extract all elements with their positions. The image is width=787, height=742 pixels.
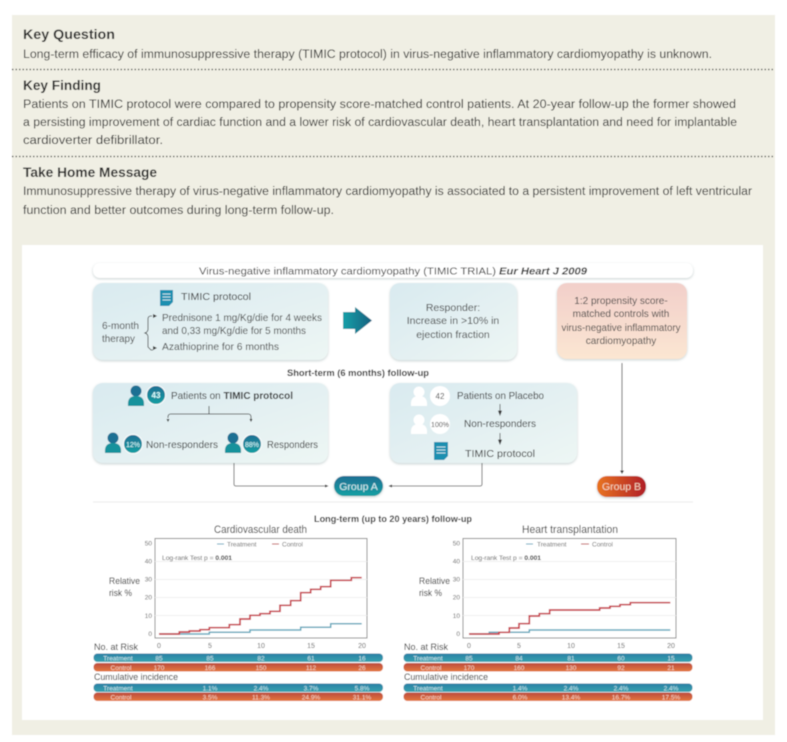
chart: heart transplantation: risk %: [419, 588, 442, 599]
table: left numbers at risk: 16: [358, 656, 366, 662]
text block: key question: [23, 27, 712, 61]
panel: patients on placebo: TIMIC protocol: [465, 448, 535, 460]
connector: TIMIC patients to group A: [234, 463, 328, 488]
panel: patients on placebo: Non-responders: [464, 418, 536, 430]
table: left numbers at risk: 61: [307, 656, 315, 662]
control curve: [159, 578, 362, 634]
arrow: protocol to responder: [343, 307, 372, 334]
panel: patients on TIMIC protocol: [93, 383, 328, 463]
table: right numbers at risk: 160: [514, 665, 525, 672]
panel: patients on TIMIC protocol: Non-responders: [146, 439, 218, 451]
chart: heart transplantation: 15: [617, 643, 625, 650]
table: left cumulative incidence: 24.9%: [302, 694, 320, 702]
chart: cardiovascular death: Log-rank Test p = 0.001: [162, 555, 232, 562]
table: left cumulative incidence: 2.4%: [254, 686, 269, 692]
chart: heart transplantation: 0: [456, 631, 460, 638]
icon: non-responders 12%: [105, 432, 142, 454]
table: left cumulative incidence: 5.8%: [355, 686, 370, 692]
table: left cumulative incidence: 3.7%: [304, 686, 319, 692]
table: right cumulative incidence: 6.0%: [513, 694, 528, 702]
chart: cardiovascular death: 15: [307, 643, 315, 650]
chart: cardiovascular death: 10: [257, 643, 265, 650]
chart: heart transplantation: 10: [567, 643, 575, 650]
table: left numbers at risk: 82: [257, 656, 265, 662]
table: right cumulative incidence: 2.4%: [564, 686, 579, 692]
table: right cumulative incidence: 13.4%: [562, 694, 580, 702]
panel: TIMIC protocol: Prednisone 1 mg/Kg/die for 4 weeks: [162, 312, 322, 324]
icon: patient 43: [128, 386, 166, 406]
branch arrows: [168, 406, 251, 421]
panel: TIMIC protocol: and 0,33 mg/Kg/die for 5 months: [162, 325, 306, 337]
chart: heart transplantation: Relative: [419, 576, 450, 587]
table: right cumulative incidence: 1.4%: [513, 686, 528, 692]
icon: non-responders 100%: [411, 414, 450, 434]
chart: cardiovascular death: Cardiovascular death: [214, 524, 307, 536]
text block: key finding: Patients on TIMIC protocol were compared to propensity score-matched control patients. At 20-year follow-up the former showed: [23, 99, 736, 111]
icon: non-responders 12%: 12%: [126, 442, 140, 449]
table: left cumulative incidence: 3.5%: [203, 694, 218, 702]
chart: heart transplantation: Treatment: [537, 542, 567, 548]
chart: heart transplantation: 5: [517, 643, 521, 650]
icon: responders 88%: [225, 432, 262, 454]
table: left numbers at risk: 85: [206, 656, 214, 662]
table: right numbers at risk: 170: [464, 665, 475, 672]
text block: take home message: Immunosuppressive therapy of virus-negative inflammatory cardiomyopathy is associated to a persistent improvement of left ventricular: [23, 186, 752, 198]
chart: cardiovascular death: Treatment: [227, 542, 257, 548]
table: left numbers at risk: 26: [358, 665, 366, 672]
chart: cardiovascular death: Control: [282, 542, 304, 548]
icon: non-responders 100%: 100%: [431, 422, 449, 429]
chart: cardiovascular death: 0: [148, 631, 152, 638]
chart: heart transplantation: 0: [467, 643, 471, 650]
text block: key finding: Key Finding: [23, 78, 101, 93]
table: right numbers at risk: 130: [566, 665, 577, 672]
panel: TIMIC protocol: 6-month: [102, 321, 139, 332]
trial title bar: [93, 263, 693, 278]
table: right cumulative incidence: Cumulative incidence: [404, 672, 488, 682]
panel: responder definition: Increase in >10% in: [407, 315, 499, 327]
text block: take home message: function and better outcomes during long-term follow-up.: [23, 205, 334, 217]
chart: cardiovascular death: 5: [208, 643, 212, 650]
panel: propensity score-matched controls: matched controls with: [573, 309, 669, 320]
panel: patients on placebo: Patients on Placebo: [457, 390, 544, 402]
trial title bar: Virus-negative inflammatory cardiomyopathy (TIMIC TRIAL) Eur Heart J 2009: [199, 266, 587, 278]
table: right cumulative incidence: 16.7%: [612, 694, 630, 702]
panel: responder definition: [390, 283, 517, 360]
panel: TIMIC protocol: [93, 283, 328, 360]
table: right numbers at risk: No. at Risk: [404, 642, 448, 652]
icon: protocol document: [434, 442, 448, 460]
chart: heart transplantation: [419, 524, 676, 650]
text block: key finding: cardioverter defibrillator.: [23, 135, 163, 147]
table: left cumulative incidence: 11.3%: [252, 694, 270, 702]
chart: cardiovascular death: 20: [358, 643, 366, 650]
chart: cardiovascular death: 30: [145, 576, 152, 584]
arrow: [498, 433, 502, 444]
table: right numbers at risk: 60: [617, 656, 625, 662]
chart: cardiovascular death: 0: [157, 643, 161, 650]
chart: heart transplantation: 20: [453, 594, 460, 602]
panel: TIMIC protocol: Azathioprine for 6 months: [162, 341, 279, 353]
icon: patient 43: 43: [152, 391, 161, 400]
badge: group A: [334, 476, 383, 496]
chart: cardiovascular death: 50: [145, 540, 152, 548]
chart: cardiovascular death: 40: [145, 558, 152, 566]
panel: responder definition: Responder:: [426, 302, 480, 314]
chart: cardiovascular death: Relative: [109, 576, 140, 587]
table: right numbers at risk: 15: [667, 656, 675, 662]
table: right cumulative incidence: 2.4%: [614, 686, 629, 692]
table: right numbers at risk: [404, 642, 692, 672]
table: left cumulative incidence: Control: [111, 694, 132, 702]
panel: patients on placebo: [390, 383, 577, 463]
bracket arrows: [145, 316, 153, 350]
table: left cumulative incidence: 31.1%: [353, 694, 371, 702]
panel: propensity score-matched controls: virus-negative inflammatory: [562, 323, 680, 334]
text block: key question: Key Question: [23, 27, 115, 42]
badge: group A: Group A: [339, 481, 378, 493]
icon: responders 88%: 88%: [245, 442, 259, 449]
table: left numbers at risk: 112: [306, 665, 317, 672]
heading: long-term follow-up: Long-term (up to 20 years) follow-up: [314, 514, 472, 524]
badge: group B: [597, 476, 646, 497]
icon: protocol document: [160, 290, 173, 306]
table: left numbers at risk: Control: [111, 665, 132, 672]
heading: short-term follow-up: Short-term (6 months) follow-up: [287, 368, 430, 378]
treatment curve: [469, 630, 670, 634]
chart: heart transplantation: Control: [592, 542, 614, 548]
table: right numbers at risk: 21: [667, 665, 675, 672]
table: right numbers at risk: 85: [465, 656, 473, 662]
icon: placebo patient 42: [411, 386, 450, 406]
table: left numbers at risk: Treatment: [103, 656, 133, 662]
table: left numbers at risk: No. at Risk: [94, 642, 138, 652]
table: left cumulative incidence: [94, 672, 383, 702]
text block: key question: Long-term efficacy of immunosuppressive therapy (TIMIC protocol) in virus-negative inflammatory cardiomyopathy is unknown.: [23, 49, 712, 61]
table: right cumulative incidence: Treatment: [413, 686, 443, 692]
control curve: [469, 603, 670, 634]
text block: take home message: [23, 165, 752, 217]
arrow: [498, 404, 502, 415]
text block: take home message: Take Home Message: [23, 165, 157, 180]
badge: group B: Group B: [602, 481, 641, 493]
table: left cumulative incidence: 1.1%: [203, 686, 218, 692]
chart: heart transplantation: 30: [453, 576, 460, 584]
table: right cumulative incidence: Control: [421, 694, 442, 702]
panel: study diagram: [22, 245, 763, 720]
text block: key finding: [23, 78, 737, 147]
text block: key finding: a persisting improvement of cardiac function and a lower risk of cardiovascular death, heart transplantation and need for implantable: [23, 117, 737, 129]
chart: heart transplantation: Heart transplantation: [522, 524, 618, 536]
chart: heart transplantation: 40: [453, 558, 460, 566]
icon: placebo patient 42: 42: [436, 392, 445, 401]
table: left cumulative incidence: Cumulative incidence: [94, 672, 178, 682]
treatment curve: [159, 624, 362, 634]
panel: patients on TIMIC protocol: Responders: [267, 439, 318, 451]
chart: heart transplantation: 10: [453, 613, 460, 620]
table: right numbers at risk: 81: [567, 656, 575, 662]
panel: TIMIC protocol: TIMIC protocol: [181, 291, 251, 303]
table: right cumulative incidence: [404, 672, 692, 702]
table: right cumulative incidence: 2.4%: [664, 686, 679, 692]
chart: cardiovascular death: [109, 524, 367, 650]
table: right numbers at risk: Control: [421, 665, 442, 672]
panel: responder definition: ejection fraction: [416, 329, 490, 341]
panel: patients on TIMIC protocol: Patients on TIMIC protocol: [171, 390, 293, 402]
chart: cardiovascular death: 10: [145, 613, 152, 620]
chart: heart transplantation: Log-rank Test p = 0.001: [471, 555, 541, 562]
table: left numbers at risk: [94, 642, 383, 672]
connector: controls to group B: [620, 363, 624, 474]
panel: TIMIC protocol: therapy: [102, 334, 135, 345]
table: right numbers at risk: 84: [515, 656, 523, 662]
table: right cumulative incidence: 17.5%: [662, 694, 680, 702]
chart: heart transplantation: 50: [453, 540, 460, 548]
table: left cumulative incidence: Treatment: [103, 686, 133, 692]
table: right numbers at risk: Treatment: [413, 656, 443, 662]
chart: cardiovascular death: risk %: [109, 588, 132, 599]
table: left numbers at risk: 170: [154, 665, 165, 672]
panel: propensity score-matched controls: cardiomyopathy: [586, 336, 656, 347]
connector: placebo patients to group A: [388, 463, 482, 488]
panel: propensity score-matched controls: [557, 283, 687, 359]
chart: heart transplantation: 20: [667, 643, 675, 650]
table: left numbers at risk: 85: [155, 656, 163, 662]
table: left numbers at risk: 166: [205, 665, 216, 672]
table: right numbers at risk: 92: [617, 665, 625, 672]
chart: cardiovascular death: 20: [145, 594, 152, 602]
panel: propensity score-matched controls: 1:2 propensity score-: [574, 296, 668, 307]
table: left numbers at risk: 150: [256, 665, 267, 672]
